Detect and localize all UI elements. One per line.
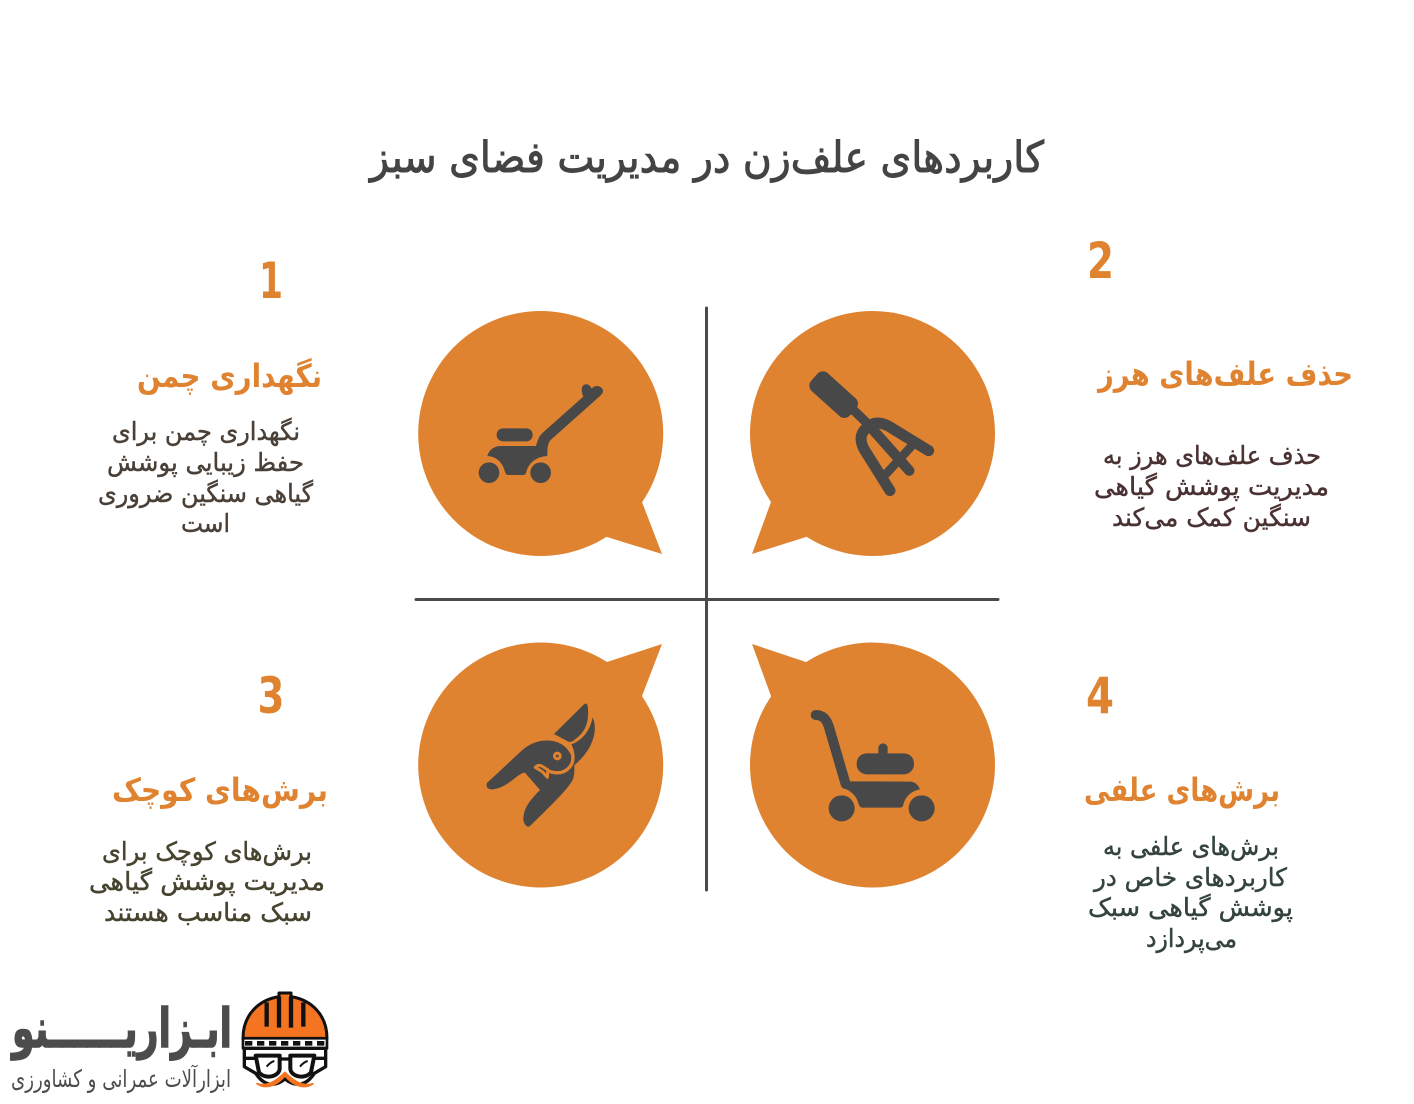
heading 2: حذف علف‌های هرز xyxy=(1096,355,1353,393)
quadrant divider: vertical xyxy=(705,308,708,890)
description 1: نگهداری چمن برای xyxy=(112,417,300,447)
description 1: حفظ زیبایی پوشش xyxy=(107,448,304,477)
bubble 3 with pruner icon xyxy=(418,642,663,888)
description 4: کاربردهای خاص در xyxy=(1092,863,1287,892)
description 2: سنگین کمک می‌کند xyxy=(1112,503,1311,532)
number 1: 1 xyxy=(259,252,283,310)
heading 4: برش‌های علفی xyxy=(1084,771,1280,809)
bubble 2 with hand fork icon xyxy=(750,311,995,556)
description 2: حذف علف‌های هرز به xyxy=(1103,441,1321,470)
panel: item 1 text xyxy=(98,252,322,538)
logo wordmark: ابـزاریــــــنو xyxy=(10,997,232,1060)
logo tagline: ابزارآلات عمرانی و کشاورزی xyxy=(11,1064,231,1093)
description 4: پوشش گیاهی سبک xyxy=(1088,893,1293,922)
icon: hand cultivator xyxy=(806,368,929,491)
heading 1: نگهداری چمن xyxy=(137,357,322,395)
description 4: برش‌های علفی به xyxy=(1103,832,1279,861)
icon: walk-behind mower xyxy=(816,715,935,821)
title: کاربردهای علف‌زن در مدیریت فضای سبز xyxy=(368,133,1044,183)
quadrant divider: horizontal xyxy=(416,598,998,601)
description 3 xyxy=(89,837,325,927)
description 4: می‌پردازد xyxy=(1146,924,1237,953)
bubble 1 with lawn mower icon xyxy=(418,311,663,556)
description 3: سبک مناسب هستند xyxy=(104,898,312,927)
icon: helmet mascot xyxy=(243,993,327,1087)
description 3: برش‌های کوچک برای xyxy=(102,837,312,866)
panel: item 2 text xyxy=(1087,232,1353,532)
number 4: 4 xyxy=(1086,667,1114,725)
description 1 xyxy=(98,417,313,538)
description 4 xyxy=(1088,832,1293,953)
number 3: 3 xyxy=(258,667,284,725)
number 2: 2 xyxy=(1087,232,1114,290)
panel: item 4 text xyxy=(1084,667,1293,953)
description 1: است xyxy=(181,509,230,538)
icon: push mower xyxy=(479,384,603,483)
heading 3: برش‌های کوچک xyxy=(112,771,328,809)
description 3: مدیریت پوشش گیاهی xyxy=(89,867,325,896)
icon: pruning shears xyxy=(487,704,595,827)
logo xyxy=(10,993,327,1093)
bubble 4 with ride mower icon xyxy=(750,642,995,888)
description 1: گیاهی سنگین ضروری xyxy=(98,479,313,509)
panel: item 3 text xyxy=(89,667,328,927)
description 2: مدیریت پوشش گیاهی xyxy=(1094,472,1329,501)
description 2 xyxy=(1094,441,1329,532)
